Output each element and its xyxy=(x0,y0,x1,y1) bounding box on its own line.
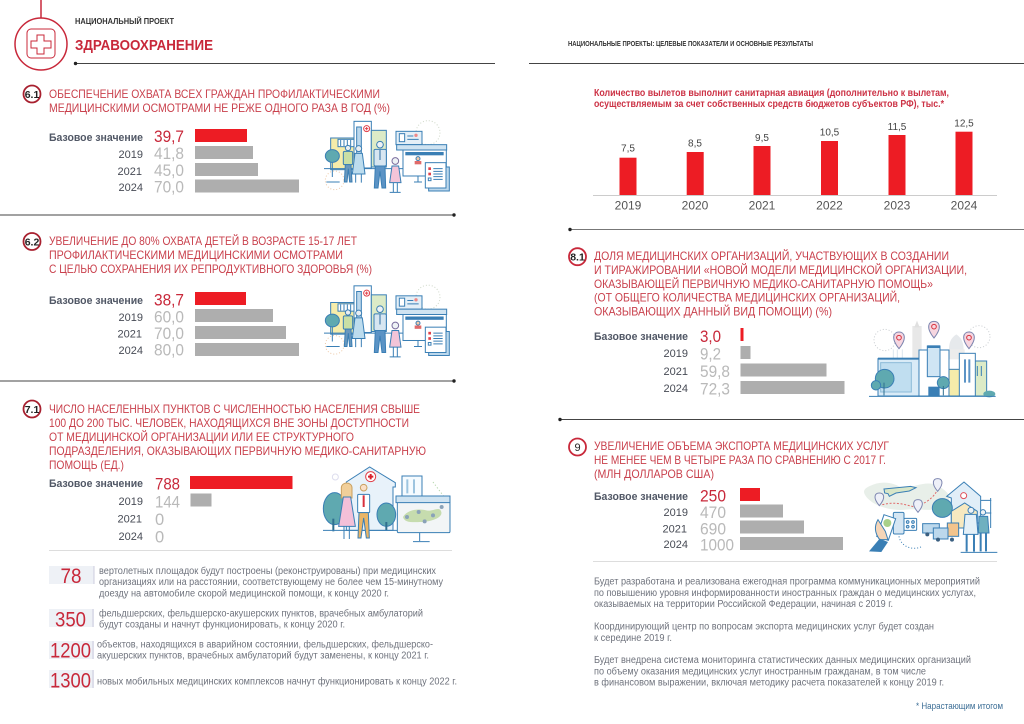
text block: export measures xyxy=(594,576,980,688)
heading 7.1: ПОДРАЗДЕЛЕНИЯ, ОКАЗЫВАЮЩИХ ПЕРВИЧНУЮ МЕДИКО-САНИТАРНУЮ xyxy=(49,444,426,458)
bar chart 6.2 xyxy=(49,292,299,360)
panel: indicator 7.1 xyxy=(24,400,450,546)
icon: medical cross emblem xyxy=(15,0,67,70)
bar chart 6.2: 2024 xyxy=(119,345,143,357)
bar chart 7.1: 2019 xyxy=(119,496,143,508)
text block: export measures: в финансовом выражении, включая методику расчета показателей к концу 2019 г. xyxy=(594,676,944,688)
bar chart 8.1: 2019 xyxy=(664,348,688,360)
stat: 1200 objects: объектов, находящихся в аварийном состоянии, фельдшерских, фельдшерско- xyxy=(97,638,433,650)
heading 8.1: ОКАЗЫВАЮЩИХ ДАННЫЙ ВИД ПОМОЩИ) (%) xyxy=(594,304,832,318)
column chart: 2020 xyxy=(682,198,709,212)
badge 6.2: 6.2 xyxy=(25,236,39,248)
bar chart 6.1 xyxy=(49,128,299,196)
text block: export measures: по повышению уровня информированности иностранных граждан о медицинских услугах, xyxy=(594,587,976,599)
column chart: 11,5 xyxy=(888,122,907,133)
chart heading xyxy=(594,88,949,110)
bar chart 6.2: 80,0 xyxy=(154,342,184,360)
chart heading: осуществляемым за счет собственных средств бюджетов субъектов РФ), тыс.* xyxy=(594,98,944,110)
heading 9: УВЕЛИЧЕНИЕ ОБЪЕМА ЭКСПОРТА МЕДИЦИНСКИХ УСЛУГ xyxy=(594,439,889,453)
bar chart 7.1: 144 xyxy=(155,494,180,512)
text block: export measures: по объему оказания медицинских услуг иностранным гражданам, в том числе xyxy=(594,666,926,678)
badge 6.1 xyxy=(24,86,40,102)
bar chart 6.2: 2021 xyxy=(118,328,142,340)
bar chart 8.1: Базовое значение xyxy=(594,331,688,343)
stat: 350 feldsher points: 350 xyxy=(55,608,86,632)
bar chart 6.1: 2019 xyxy=(119,149,143,161)
column chart: 2022 xyxy=(816,198,843,212)
heading 7.1: ЧИСЛО НАСЕЛЕННЫХ ПУНКТОВ С ЧИСЛЕННОСТЬЮ НАСЕЛЕНИЯ СВЫШЕ xyxy=(49,402,420,416)
bar chart 9: 470 xyxy=(700,504,726,522)
column chart: 12,5 xyxy=(954,118,974,130)
heading 8.1: И ТИРАЖИРОВАНИИ «НОВОЙ МОДЕЛИ МЕДИЦИНСКОЙ ОРГАНИЗАЦИИ, xyxy=(594,262,967,277)
bar chart 8.1 xyxy=(594,328,844,398)
stat: 78 helipads: вертолетных площадок будут построены (реконструированы) при медицинских xyxy=(99,565,436,577)
bar chart 6.2: 38,7 xyxy=(154,292,184,310)
column chart: 8,5 xyxy=(688,138,702,150)
bar chart 9: 2024 xyxy=(664,539,688,551)
stat: 350 feldsher points: фельдшерских, фельдшерско-акушерских пунктов, врачебных амбулаторий xyxy=(99,608,423,620)
bar chart 9: 250 xyxy=(700,488,726,506)
panel: indicator 8.1 xyxy=(569,248,996,398)
heading 7.1: ПОМОЩЬ (ЕД.) xyxy=(49,458,124,472)
bar chart 9: 2021 xyxy=(663,524,687,536)
badge 7.1 xyxy=(24,400,40,418)
badge 7.1: 7.1 xyxy=(25,404,39,416)
bar chart 6.1: Базовое значение xyxy=(49,132,143,144)
stat: 1300 mobile complexes xyxy=(49,670,457,692)
column chart: 2024 xyxy=(951,198,978,212)
badge 6.2 xyxy=(24,233,40,250)
bar chart 8.1: 2024 xyxy=(664,383,688,395)
text block: export measures: к середине 2019 г. xyxy=(594,633,672,644)
bar chart 6.1: 2021 xyxy=(118,166,142,178)
bar chart 9: 1000 xyxy=(700,536,734,554)
badge 9 xyxy=(569,438,586,456)
heading 6.2: ПРОФИЛАКТИЧЕСКИМИ МЕДИЦИНСКИМИ ОСМОТРАМИ xyxy=(49,248,343,262)
column chart: 2019 xyxy=(615,198,642,212)
text block: export measures: Будет разработана и реализована ежегодная программа коммуникационных мероприятий xyxy=(594,576,980,588)
column chart xyxy=(593,118,997,212)
badge 6.1: 6.1 xyxy=(25,89,39,101)
bar chart 6.1: 41,8 xyxy=(154,145,184,163)
bar chart 8.1: 59,8 xyxy=(700,363,730,381)
heading 8.1: ОКАЗЫВАЮЩЕЙ ПЕРВИЧНУЮ МЕДИКО-САНИТАРНУЮ ПОМОЩЬ» xyxy=(594,276,933,291)
stat: 78 helipads: 78 xyxy=(60,565,82,588)
stat: 1300 mobile complexes: 1300 xyxy=(50,670,91,692)
heading 7.1: ОТ МЕДИЦИНСКОЙ ОРГАНИЗАЦИИ ИЛИ ЕЕ СТРУКТУРНОГО xyxy=(49,429,354,444)
header: left page xyxy=(15,0,213,70)
bar chart 9: Базовое значение xyxy=(594,491,688,503)
heading 6.2 xyxy=(49,233,372,276)
illustration: family and clinic xyxy=(324,121,449,192)
bar chart 8.1: 9,2 xyxy=(700,346,721,364)
column chart: 9,5 xyxy=(755,133,769,144)
bar chart 7.1: 2021 xyxy=(118,514,142,526)
bar chart 8.1: 3,0 xyxy=(700,328,721,346)
column chart: 10,5 xyxy=(820,128,840,138)
stat: 1200 objects xyxy=(49,638,433,662)
badge 8.1: 8.1 xyxy=(570,252,585,264)
illustration: city hospitals with pins xyxy=(869,321,996,397)
bar chart 9 xyxy=(594,488,843,554)
illustration: couple, clinic and map monitor xyxy=(323,467,450,542)
stat: 350 feldsher points: будут созданы и начнут функционировать, к концу 2020 г. xyxy=(99,618,345,630)
stat: 350 feldsher points xyxy=(49,608,423,632)
heading 8.1: (ОТ ОБЩЕГО КОЛИЧЕСТВА МЕДИЦИНСКИХ ОРГАНИЗАЦИЙ, xyxy=(594,290,900,304)
bar chart 6.2: 2019 xyxy=(119,312,143,324)
text block: export measures: оказываемых на территории Российской Федерации, начиная с 2019 г. xyxy=(594,599,893,610)
heading 7.1 xyxy=(49,402,426,472)
bar chart 8.1: 72,3 xyxy=(700,380,730,398)
heading 9: НЕ МЕНЕЕ ЧЕМ В ЧЕТЫРЕ РАЗА ПО СРАВНЕНИЮ С 2017 Г. xyxy=(594,453,886,467)
bar chart 7.1: 788 xyxy=(155,476,180,494)
text block: export measures: Будет внедрена система мониторинга статистических данных медицинских организаций xyxy=(594,655,971,666)
text block: export measures: Координирующий центр по вопросам экспорта медицинских услуг будет создан xyxy=(594,620,934,632)
stat: 1300 mobile complexes: новых мобильных медицинских комплексов начнут функционировать к концу 2022 г. xyxy=(97,676,457,688)
bar chart 8.1: 2021 xyxy=(664,366,688,378)
project label: НАЦИОНАЛЬНЫЙ ПРОЕКТ xyxy=(75,17,174,26)
heading 6.2: С ЦЕЛЬЮ СОХРАНЕНИЯ ИХ РЕПРОДУКТИВНОГО ЗДОРОВЬЯ (%) xyxy=(49,262,372,276)
chart heading: Количество вылетов выполнит санитарная авиация (дополнительно к вылетам, xyxy=(594,88,949,99)
bar chart 9: 2019 xyxy=(664,507,688,519)
header: right page: НАЦИОНАЛЬНЫЕ ПРОЕКТЫ: ЦЕЛЕВЫЕ ПОКАЗАТЕЛИ И ОСНОВНЫЕ РЕЗУЛЬТАТЫ xyxy=(568,41,813,48)
bar chart 6.1: 45,0 xyxy=(154,162,184,180)
stat: 78 helipads: организациях или на расстоянии, соответствующему не более чем 15-минутному xyxy=(99,576,443,588)
stat: 1200 objects: 1200 xyxy=(50,640,91,662)
column chart: 2021 xyxy=(749,198,776,212)
badge 8.1 xyxy=(569,248,586,265)
bar chart 9: 690 xyxy=(700,520,726,538)
bar chart 6.1: 39,7 xyxy=(154,128,184,146)
bar chart 7.1 xyxy=(49,476,292,546)
illustration: medical export logistics xyxy=(864,479,997,552)
panel: indicator 9 xyxy=(569,438,997,554)
heading 9: (МЛН ДОЛЛАРОВ США) xyxy=(594,467,714,481)
title: ЗДРАВООХРАНЕНИЕ xyxy=(75,37,213,54)
panel: indicator 6.2 xyxy=(24,233,449,360)
bar chart 7.1: 0 xyxy=(155,528,164,546)
heading 6.2: УВЕЛИЧЕНИЕ ДО 80% ОХВАТА ДЕТЕЙ В ВОЗРАСТЕ 15-17 ЛЕТ xyxy=(49,233,358,248)
illustration: family and clinic xyxy=(324,285,449,357)
stat: 1200 objects: акушерских пунктов, врачебных амбулаторий будут заменены, к концу 2021 г. xyxy=(97,650,429,662)
footnote: * Нарастающим итогом xyxy=(916,701,1003,712)
bar chart 6.1: 2024 xyxy=(119,182,143,194)
heading 9 xyxy=(594,439,889,481)
heading 8.1 xyxy=(594,248,967,318)
panel: air ambulance chart xyxy=(593,88,997,212)
heading 6.1: МЕДИЦИНСКИМИ ОСМОТРАМИ НЕ РЕЖЕ ОДНОГО РАЗА В ГОД (%) xyxy=(49,101,390,115)
bar chart 7.1: Базовое значение xyxy=(49,478,143,490)
stat: 78 helipads xyxy=(49,565,443,600)
column chart: 2023 xyxy=(884,198,911,212)
bar chart 7.1: 2024 xyxy=(119,531,143,543)
heading 8.1: ДОЛЯ МЕДИЦИНСКИХ ОРГАНИЗАЦИЙ, УЧАСТВУЮЩИХ В СОЗДАНИИ xyxy=(594,248,949,263)
heading 6.1: ОБЕСПЕЧЕНИЕ ОХВАТА ВСЕХ ГРАЖДАН ПРОФИЛАКТИЧЕСКИМИ xyxy=(49,87,380,101)
bar chart 7.1: 0 xyxy=(155,511,164,529)
bar chart 6.1: 70,0 xyxy=(154,178,184,196)
column chart: 7,5 xyxy=(621,144,635,154)
panel: indicator 6.1 xyxy=(24,86,449,196)
heading 6.1 xyxy=(49,87,390,115)
bar chart 6.2: 60,0 xyxy=(154,308,184,326)
stat: 78 helipads: доезду на автомобиле скорой медицинской помощи, к концу 2020 г. xyxy=(99,588,389,600)
badge 9: 9 xyxy=(574,442,581,454)
bar chart 6.2: 70,0 xyxy=(154,325,184,343)
heading 7.1: 100 ДО 200 ТЫС. ЧЕЛОВЕК, НАХОДЯЩИХСЯ ВНЕ ЗОНЫ ДОСТУПНОСТИ xyxy=(49,416,409,430)
bar chart 6.2: Базовое значение xyxy=(49,295,143,307)
